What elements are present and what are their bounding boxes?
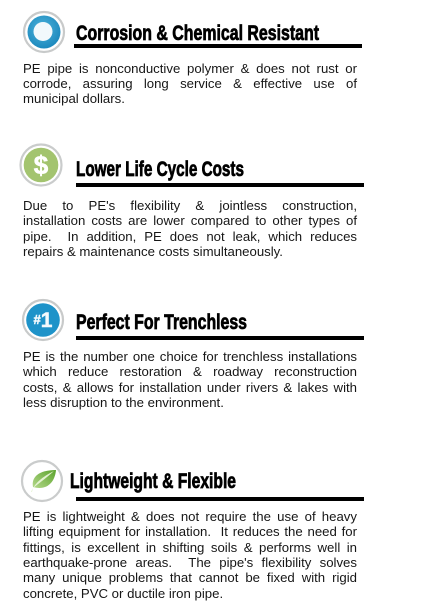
icon: number one: # — [34, 312, 42, 327]
icon: blue ring — [22, 10, 65, 54]
icon: number one — [22, 298, 64, 342]
icon: green dollar: $ — [34, 150, 49, 180]
body text: PE is the number one choice for trenchless installations — [23, 349, 357, 364]
body text — [23, 198, 358, 259]
body text — [23, 349, 357, 410]
section: corrosion and chemical resistant — [22, 10, 362, 106]
body text: PE pipe is nonconductive polymer & does not rust or — [23, 60, 357, 76]
body text: installation costs are lower compared to other types of — [23, 213, 357, 228]
heading rule — [76, 497, 364, 501]
heading: Corrosion & Chemical Resistant — [76, 22, 319, 45]
body text: many unique problems that cannot be fixed with rigid — [23, 570, 357, 585]
icon: number one: 1 — [41, 309, 53, 332]
icon: green leaf — [20, 460, 63, 502]
heading rule — [76, 183, 364, 187]
body text: earthquake-prone areas. The pipe's flexibility solves — [23, 555, 357, 570]
body text: which reduce restoration & roadway reconstruction — [23, 364, 357, 379]
icon: green dollar — [20, 143, 62, 187]
body text: repairs & maintenance costs simultaneously. — [23, 244, 283, 259]
heading: Perfect For Trenchless — [76, 311, 247, 334]
body text: fittings, is excellent in shifting soils & performs well in — [23, 540, 357, 555]
body text — [23, 60, 358, 106]
body text: lifting equipment for installation. It reduces the need for — [23, 524, 357, 539]
section: lightweight and flexible — [20, 460, 364, 601]
body text: pipe. In addition, PE does not leak, which reduces — [23, 229, 357, 244]
body text: PE is lightweight & does not require the use of heavy — [23, 509, 357, 524]
heading: Lower Life Cycle Costs — [76, 158, 244, 181]
heading rule — [74, 44, 362, 48]
body text: less disruption to the environment. — [23, 395, 224, 410]
body text: costs, & allows for installation under rivers & lakes with — [23, 380, 357, 395]
body text: corrode, assuring long service & effective use of — [23, 76, 357, 91]
body text: concrete, PVC or ductile iron pipe. — [23, 586, 223, 601]
section: perfect for trenchless — [22, 298, 364, 410]
body text: municipal dollars. — [23, 91, 125, 106]
heading rule — [76, 336, 364, 340]
body text — [23, 509, 357, 601]
body text: Due to PE's flexibility & jointless construction, — [23, 198, 357, 213]
section: lower life cycle costs — [20, 143, 364, 259]
heading: Lightweight & Flexible — [70, 470, 236, 493]
